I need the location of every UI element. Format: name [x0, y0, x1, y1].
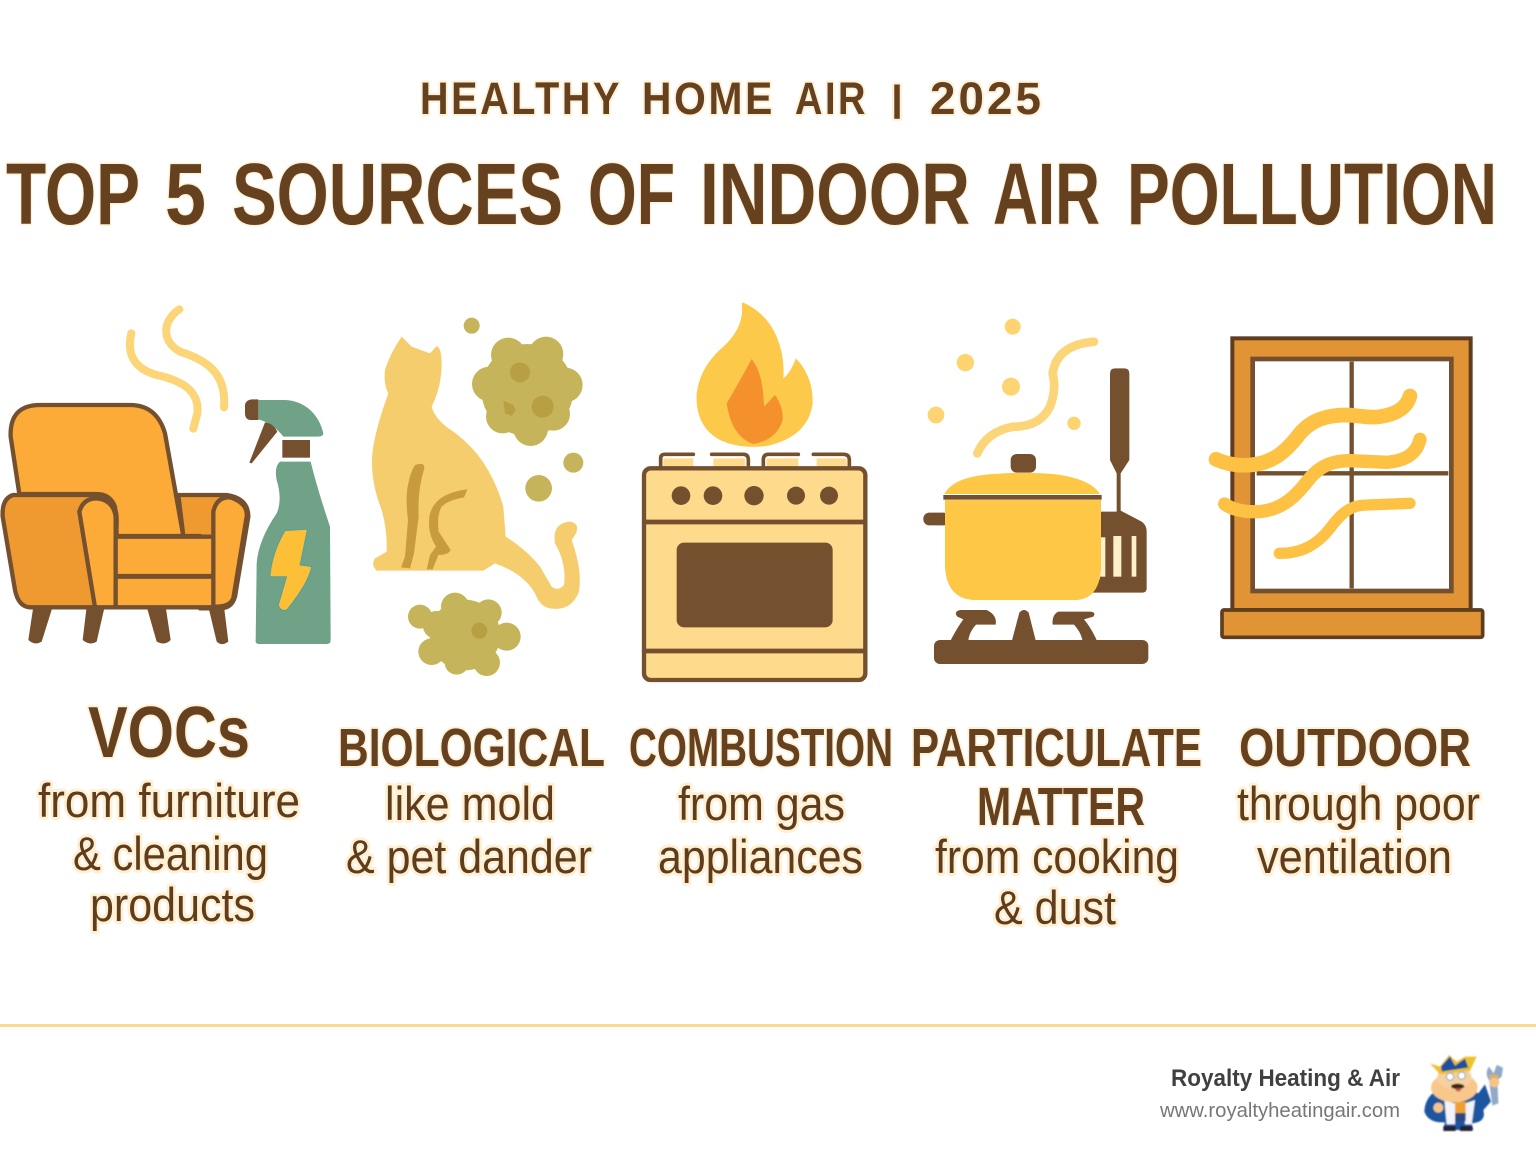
brand url: www.royaltyheatingair.com — [1159, 1100, 1400, 1122]
eyebrow heading — [420, 73, 1044, 124]
icon: armchair — [3, 405, 248, 644]
heading: combustion: COMBUSTION — [629, 718, 893, 778]
icon: mold spores — [408, 318, 583, 676]
title: TOP — [6, 146, 140, 243]
icon: stove — [644, 454, 865, 680]
icon: rising vapour — [130, 309, 224, 429]
heading: particulate matter: PARTICULATE — [911, 718, 1202, 778]
text: biological description — [346, 777, 592, 883]
title: OF — [588, 146, 675, 243]
text: outdoor description: through poor — [1237, 777, 1480, 830]
column: VOCs — [38, 693, 300, 931]
text: combustion description — [658, 777, 863, 883]
icon: cooking pot and spatula — [923, 319, 1148, 664]
eyebrow heading: | — [891, 78, 903, 120]
brand name: Royalty Heating & Air — [1171, 1065, 1400, 1092]
text: outdoor description — [1237, 777, 1480, 883]
heading: outdoor: OUTDOOR — [1239, 718, 1471, 778]
text: combustion description: from gas — [678, 777, 845, 830]
footer brand text — [1159, 1065, 1400, 1122]
text: VOCs description — [38, 774, 300, 931]
icon: cat — [372, 337, 580, 609]
icon: flame — [697, 303, 813, 447]
heading: biological: BIOLOGICAL — [338, 718, 605, 778]
icon: mascot king — [1424, 1055, 1503, 1131]
text: VOCs description: products — [90, 878, 255, 931]
icon: window frame — [1222, 338, 1483, 637]
column: biological — [338, 718, 605, 883]
text: particulate description: from cooking — [935, 830, 1179, 883]
title — [6, 146, 1497, 243]
column: combustion — [629, 718, 893, 883]
heading: VOCs: VOCs — [88, 693, 250, 773]
heading: particulate matter — [911, 718, 1202, 837]
icon: gas stove with flame — [644, 303, 865, 680]
text: biological description: like mold — [385, 777, 555, 830]
text: VOCs description: from furniture — [38, 774, 300, 827]
eyebrow heading: 2025 — [930, 73, 1044, 124]
icon: pot — [923, 454, 1102, 600]
title: 5 — [165, 146, 206, 243]
icon: spray bottle — [245, 399, 331, 644]
text: outdoor description: ventilation — [1257, 830, 1452, 883]
column: outdoor — [1237, 718, 1480, 883]
icon: air drafts — [1216, 396, 1420, 553]
eyebrow heading: HOME — [642, 73, 775, 124]
eyebrow heading: AIR — [795, 73, 868, 124]
title: SOURCES — [232, 146, 563, 243]
text: particulate description — [935, 830, 1179, 934]
icon: window with drafts — [1216, 338, 1483, 637]
icon: cat and mold — [372, 318, 583, 676]
icon: armchair and spray bottle — [3, 309, 331, 644]
column: particulate matter — [911, 718, 1202, 934]
icon: burner — [934, 610, 1148, 664]
title: AIR — [993, 146, 1100, 243]
eyebrow heading: HEALTHY — [420, 73, 622, 124]
text: VOCs description: & cleaning — [73, 827, 268, 880]
heading: particulate matter: MATTER — [977, 777, 1145, 837]
icon: particles and steam — [928, 319, 1094, 453]
text: combustion description: appliances — [658, 830, 863, 883]
footer divider — [0, 1024, 1536, 1027]
text: biological description: & pet dander — [346, 830, 592, 883]
title: INDOOR — [700, 146, 970, 243]
icon: spatula — [1093, 368, 1147, 593]
text: particulate description: & dust — [994, 881, 1116, 934]
